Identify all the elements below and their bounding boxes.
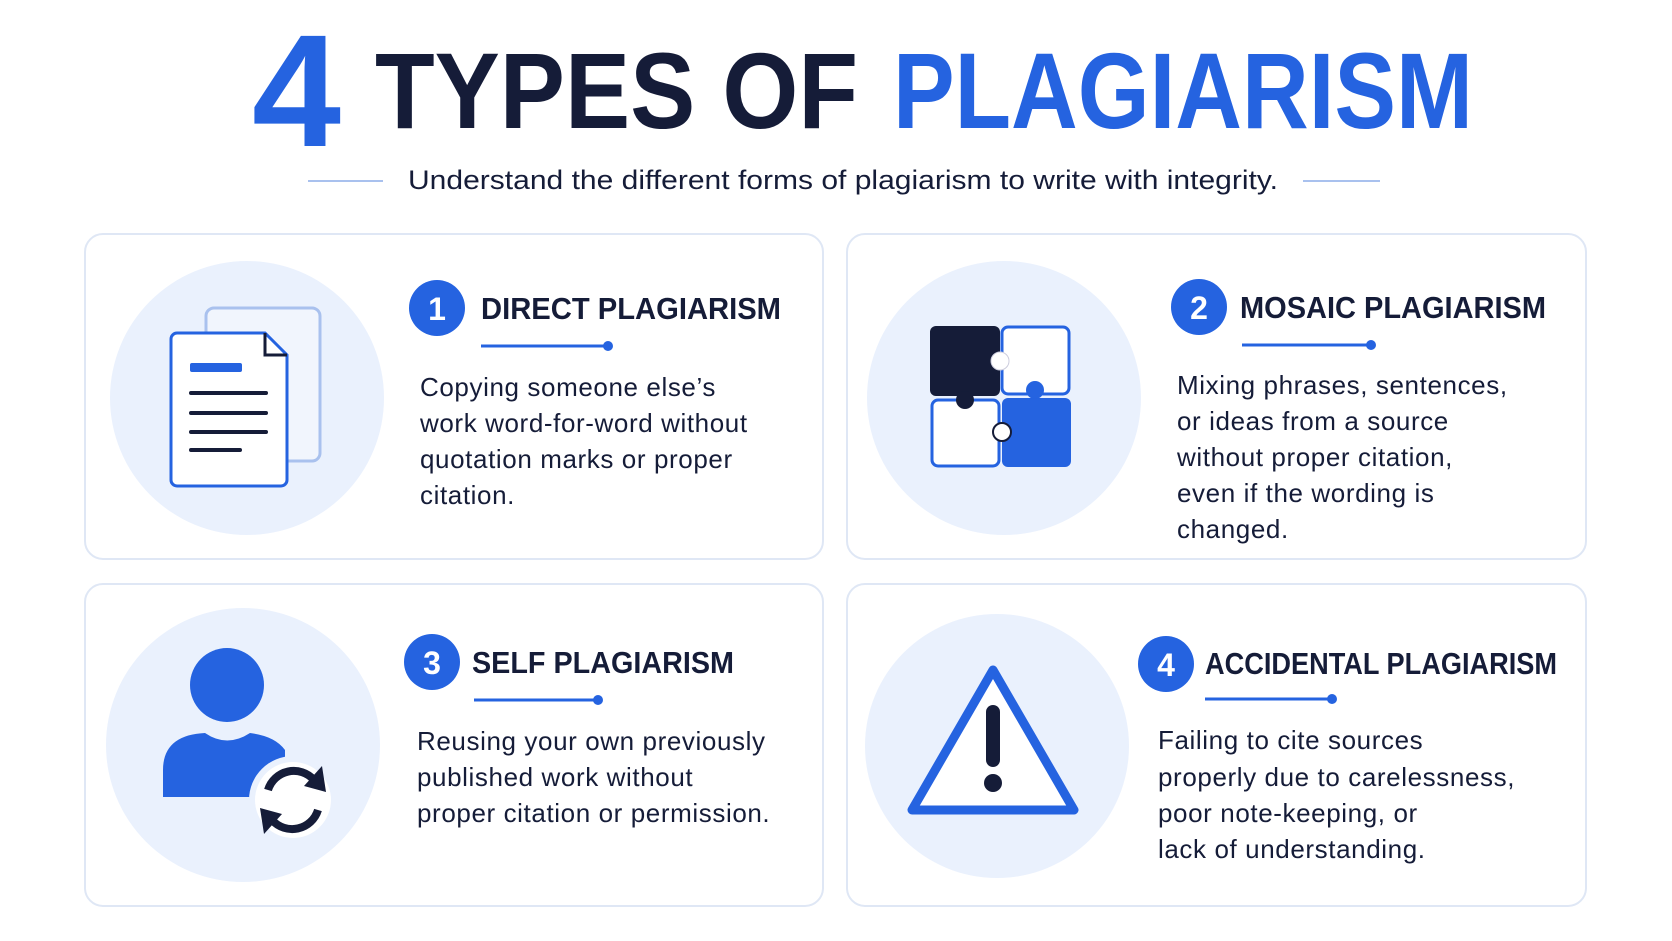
text: mosaic description: Mixing phrases, sentences, — [1177, 370, 1508, 400]
heading: self plagiarism: SELF PLAGIARISM — [472, 645, 734, 680]
text: accidental description — [1158, 725, 1515, 864]
panel: direct plagiarism — [85, 234, 823, 559]
text: mosaic description: or ideas from a source — [1177, 406, 1449, 436]
title: 4 — [252, 1, 341, 180]
text: mosaic description: changed. — [1177, 514, 1289, 544]
heading: self plagiarism — [404, 634, 734, 705]
icon: puzzle — [867, 261, 1141, 535]
text: self description: Reusing your own previously — [417, 726, 766, 756]
heading: direct plagiarism: DIRECT PLAGIARISM — [481, 291, 781, 326]
text: mosaic description: even if the wording is — [1177, 478, 1434, 508]
title: TYPES OF — [375, 30, 858, 151]
subtitle: Understand the different forms of plagiarism to write with integrity. — [408, 165, 1278, 195]
icon: person with sync — [106, 608, 380, 882]
text: direct description — [419, 372, 748, 510]
panel: self plagiarism — [85, 584, 823, 906]
icon: documents — [110, 261, 384, 535]
text: accidental description: Failing to cite sources — [1158, 725, 1423, 755]
heading: mosaic plagiarism: MOSAIC PLAGIARISM — [1240, 290, 1546, 325]
title — [252, 1, 1473, 180]
text: self description: proper citation or permission. — [417, 798, 770, 828]
heading: self plagiarism: 3 — [423, 645, 441, 681]
text: mosaic description: without proper citation, — [1176, 442, 1453, 472]
text: accidental description: poor note-keeping, or — [1158, 798, 1418, 828]
text: direct description: Copying someone else’s — [420, 372, 716, 402]
text: direct description: citation. — [420, 480, 515, 510]
text: accidental description: lack of understanding. — [1158, 834, 1426, 864]
text: direct description: quotation marks or proper — [420, 444, 733, 474]
heading: mosaic plagiarism: 2 — [1190, 290, 1208, 326]
heading: accidental plagiarism: ACCIDENTAL PLAGIARISM — [1205, 646, 1557, 681]
heading: accidental plagiarism: 4 — [1157, 647, 1175, 683]
text: direct description: work word-for-word without — [419, 408, 748, 438]
text: mosaic description — [1176, 370, 1508, 544]
heading: direct plagiarism — [409, 280, 781, 351]
text: self description: published work without — [417, 762, 693, 792]
icon: warning triangle — [865, 614, 1129, 878]
heading: mosaic plagiarism — [1171, 279, 1546, 350]
text: self description — [417, 726, 770, 828]
heading: direct plagiarism: 1 — [428, 291, 446, 327]
title: PLAGIARISM — [893, 30, 1473, 151]
panel: mosaic plagiarism — [847, 234, 1586, 559]
heading: accidental plagiarism — [1138, 636, 1557, 704]
text: accidental description: properly due to carelessness, — [1158, 762, 1515, 792]
panel: accidental plagiarism — [847, 584, 1586, 906]
